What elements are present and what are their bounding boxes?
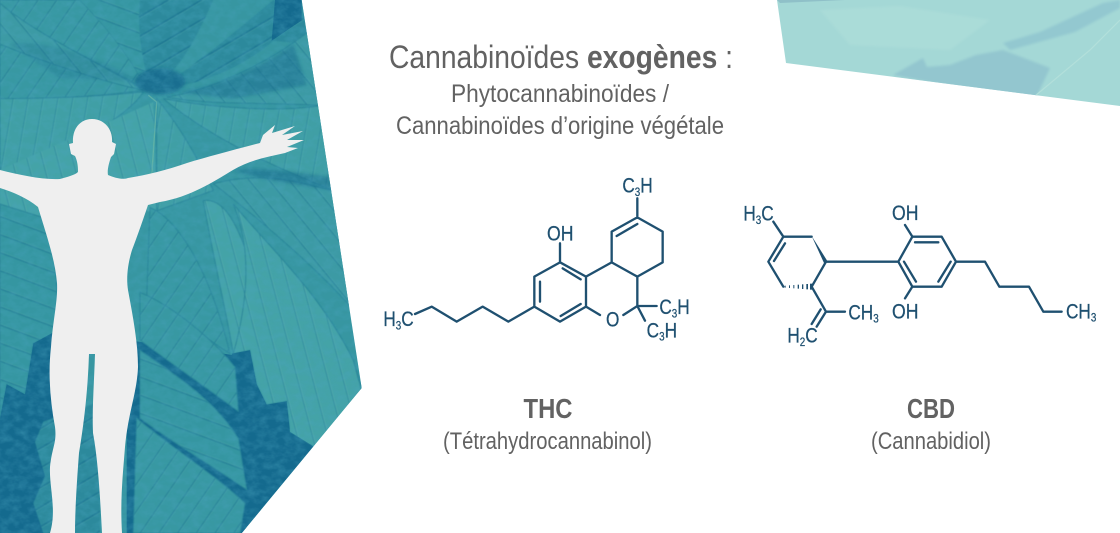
leaflet: left middle	[0, 46, 138, 97]
subtitle line 2: Cannabinoïdes d’origine végétale	[396, 112, 724, 140]
shadow: lower middle base	[127, 340, 247, 533]
subtitle line 1: Phytocannabinoïdes /	[451, 80, 669, 108]
leaflet: lower right lobe	[290, 388, 362, 446]
leaflet: top left centre	[94, 0, 144, 71]
leaflet: upper left	[0, 0, 138, 82]
shadow: band upper left	[14, 44, 132, 80]
label H3C: 3	[756, 214, 761, 227]
THC full name: (Tétrahydrocannabinol)	[443, 428, 652, 455]
shadow: lower right gap	[232, 350, 367, 533]
THC name: THC	[524, 393, 572, 424]
leaflet: lower centre 3	[133, 418, 245, 533]
label CH3 right: 3	[1091, 312, 1096, 325]
leaflet: behind legs upper	[33, 401, 100, 533]
label C3H right: 3	[672, 307, 677, 321]
leaflet: left upper	[0, 14, 134, 87]
caption: THC	[443, 393, 652, 455]
label CH3: CH	[848, 302, 873, 325]
shadow: bottom left gap	[0, 333, 54, 533]
label C3H top: 3	[635, 186, 640, 199]
shadow: band right of centre	[173, 44, 307, 99]
label H2C: H	[787, 325, 800, 348]
heading: exogenous cannabinoids	[389, 39, 733, 140]
leaflet: lower right	[233, 204, 362, 445]
label C3H right: C	[659, 297, 672, 319]
caption: CBD	[871, 393, 991, 455]
THC bonds	[415, 198, 663, 322]
shadow: band right	[233, 169, 333, 190]
leaflet: centre column	[157, 99, 213, 211]
leaflet: top right	[155, 0, 308, 89]
label H3C: 3	[396, 319, 401, 333]
label C3H top: C	[622, 175, 635, 198]
leaf mottled texture	[0, 0, 373, 533]
leaf tone overlay	[0, 0, 373, 533]
faded leaf shadow upper	[1003, 0, 1120, 50]
label O: O	[606, 309, 619, 332]
shadow: centre of plant	[135, 69, 185, 95]
faded leaf vein	[1035, 20, 1120, 96]
label C3H lower: H	[665, 320, 677, 343]
label H3C: H	[383, 309, 396, 331]
leaflet: centre right narrow	[203, 200, 246, 348]
label H2C: 2	[800, 336, 805, 349]
leaflet: right wide	[213, 178, 350, 306]
label OH bottom: OH	[892, 300, 918, 324]
label H3C: H	[743, 203, 756, 226]
label C3H lower: 3	[659, 331, 665, 344]
faded leaf top edge	[777, 0, 845, 3]
shadow: top right corner	[272, 0, 302, 41]
leaf stem	[148, 95, 157, 177]
label OH: OH	[547, 222, 573, 246]
CBD name: CBD	[907, 393, 955, 424]
label H3C: C	[401, 309, 414, 331]
leaflet: centre right	[147, 207, 230, 354]
label H2C: C	[805, 325, 818, 348]
CBD bonds	[768, 222, 1062, 327]
CBD full name: (Cannabidiol)	[871, 428, 991, 455]
leaflet: top centre dark	[139, 0, 213, 89]
leaflet: right middle	[163, 99, 333, 190]
leaflet: lower centre 2	[140, 350, 247, 490]
leaflet: left lower	[0, 92, 143, 177]
leaflet: behind figure	[0, 102, 157, 218]
faded leaf shadow lower	[896, 50, 1050, 96]
leaflet: lower centre 1	[140, 292, 238, 411]
label C3H right: H	[677, 297, 690, 319]
leaflet: far left hanging	[0, 204, 57, 418]
wedge bond	[812, 236, 827, 263]
panel: cannabis leaf photo	[0, 0, 373, 533]
label CH3: 3	[873, 313, 879, 326]
leaflet: upper right	[167, 31, 322, 105]
label H3C: C	[761, 203, 774, 226]
label C3H lower: C	[647, 320, 659, 343]
molecule: THC	[383, 175, 690, 344]
label OH top: OH	[892, 202, 918, 225]
panel: faded leaf top right	[777, 0, 1120, 106]
faded leaf light patch	[820, 6, 990, 50]
title line: Cannabinoïdes exogènes :	[389, 39, 733, 75]
human silhouette	[0, 119, 304, 533]
hashed bond	[785, 284, 812, 290]
label CH3 right: CH	[1066, 301, 1091, 324]
molecule: CBD	[743, 202, 1096, 349]
label C3H top: H	[640, 175, 653, 198]
